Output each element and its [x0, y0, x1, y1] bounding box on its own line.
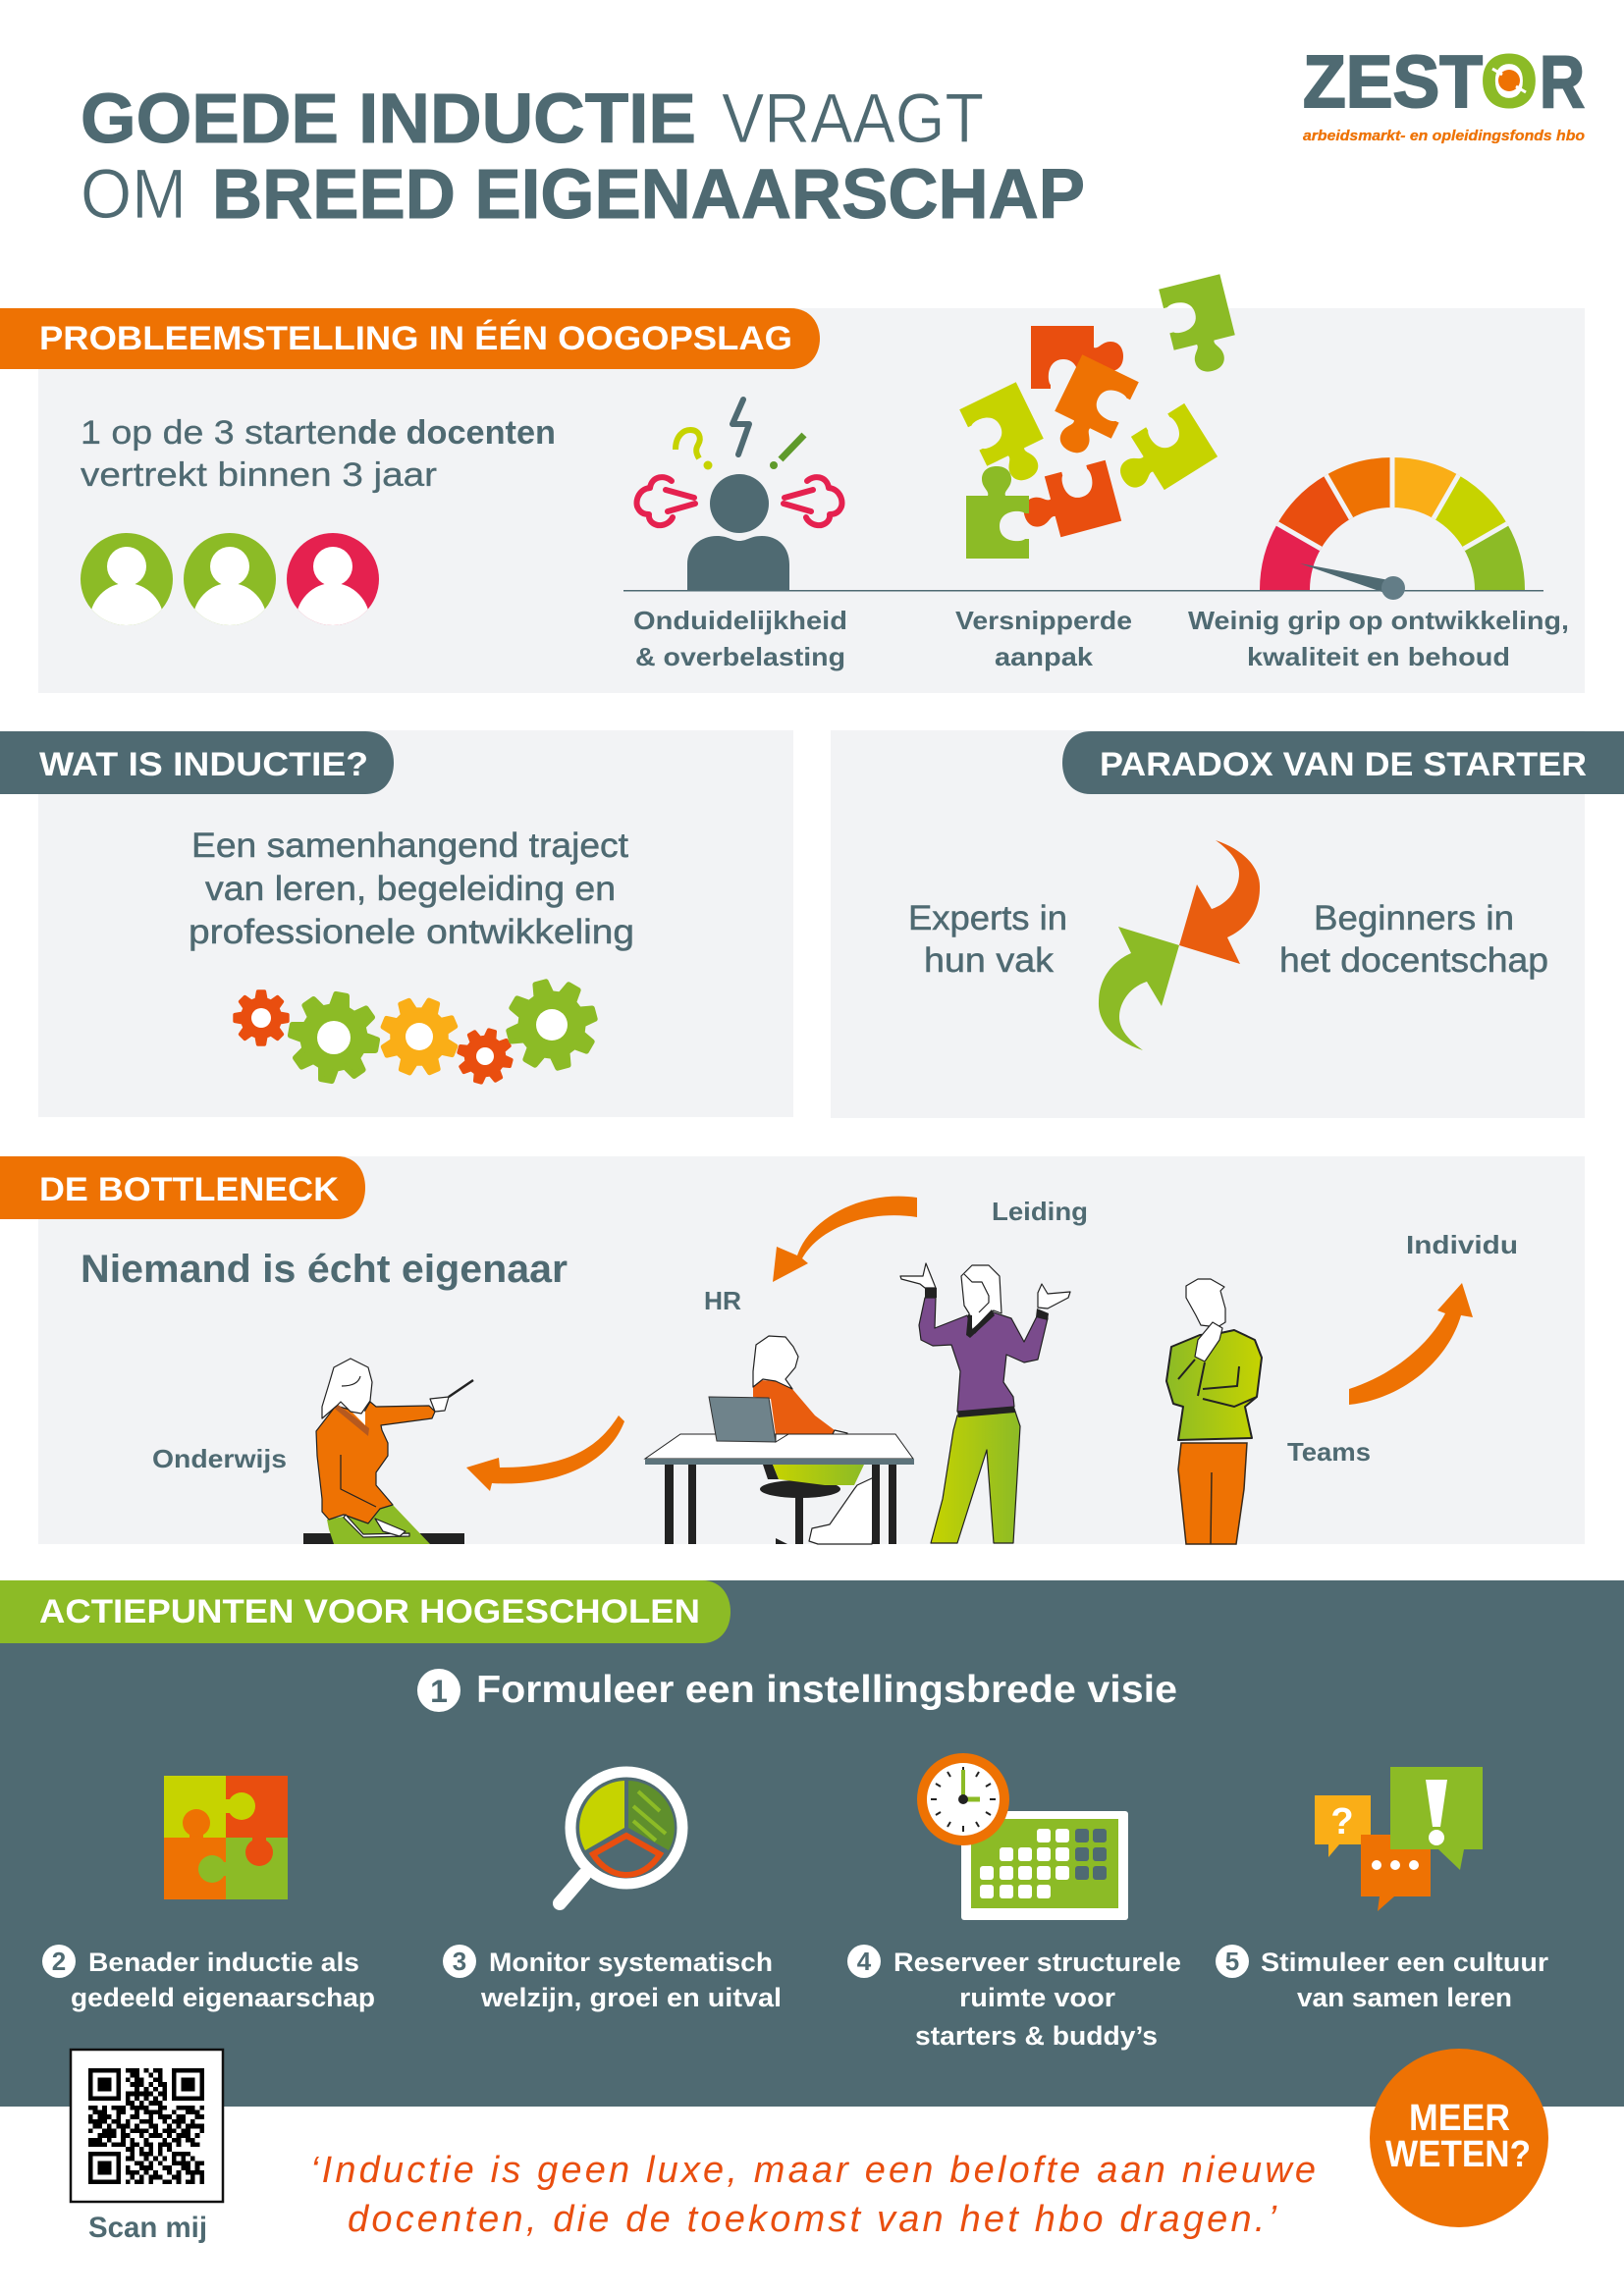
- heading: de bottleneck: DE BOTTLENECK: [39, 1171, 339, 1208]
- logo: Zestor: [1303, 40, 1585, 144]
- heading: paradox: PARADOX VAN DE STARTER: [1100, 746, 1587, 783]
- logo: Zestor: R: [1540, 40, 1585, 123]
- action 3: welzijn, groei en uitval: [480, 1983, 782, 2012]
- figure: thinking man: [1166, 1279, 1262, 1544]
- action 3: 3: [453, 1947, 466, 1976]
- QR code: [71, 2050, 223, 2202]
- label: weinig grip: [1188, 606, 1569, 671]
- text: experts: Experts in: [908, 899, 1067, 937]
- text: experts: hun vak: [924, 941, 1055, 980]
- action 5: 5: [1225, 1947, 1239, 1976]
- title: OM: [81, 156, 187, 234]
- callout: meer weten: [1370, 2049, 1548, 2227]
- text: definition: van leren, begeleiding en: [205, 870, 616, 908]
- icon: gauge: [1260, 457, 1525, 600]
- text: 1 op de 3: vertrekt binnen 3 jaar: [81, 456, 437, 494]
- action 5: [1216, 1945, 1549, 2012]
- action 2: [42, 1945, 375, 2012]
- label: weinig grip: kwaliteit en behoud: [1247, 642, 1510, 671]
- figure: leader with raised hands: [900, 1263, 1070, 1543]
- action 5: Stimuleer een cultuur: [1261, 1948, 1549, 1977]
- icon: overloaded person: [636, 400, 842, 590]
- heading: de bottleneck: [0, 1156, 365, 1219]
- label: leiding: Leiding: [992, 1197, 1088, 1226]
- panel: paradox van de starter: [831, 730, 1624, 1118]
- arrow: HR to onderwijs: [466, 1415, 624, 1491]
- label: versnipperde aanpak: Versnipperde: [955, 606, 1132, 635]
- action 4: Reserveer structurele: [893, 1948, 1181, 1977]
- title: [81, 80, 1085, 234]
- title: VRAAGT: [722, 80, 984, 158]
- action 2: gedeeld eigenaarschap: [71, 1983, 375, 2012]
- action 2: Benader inductie als: [88, 1948, 359, 1977]
- icon: speech bubbles: ?: [1330, 1801, 1354, 1842]
- action 1: heading: 1: [430, 1674, 448, 1709]
- text: 1 op de 3: de docenten: [357, 414, 556, 452]
- action 2: 2: [52, 1947, 66, 1976]
- text: 1 op de 3: [81, 414, 556, 494]
- action 4: [847, 1945, 1181, 2051]
- text: beginners: Beginners in: [1314, 899, 1514, 937]
- label: onduidelijkheid: Onduidelijkheid: [633, 606, 847, 635]
- action 5: van samen leren: [1297, 1983, 1512, 2012]
- heading: actiepunten: [0, 1580, 731, 1643]
- logo: Zestor: arbeidsmarkt- en opleidingsfonds hbo: [1303, 128, 1585, 144]
- icon: scattered puzzle pieces: [959, 274, 1242, 559]
- quote: [310, 2150, 1316, 2240]
- callout: meer weten: MEER: [1409, 2098, 1510, 2139]
- text: beginners: het docentschap: [1279, 941, 1548, 980]
- text: definition: Een samenhangend traject: [191, 827, 628, 865]
- label: teams: Teams: [1287, 1437, 1371, 1467]
- panel: wat is inductie: [0, 730, 793, 1117]
- text: experts: [908, 899, 1067, 980]
- label: onderwijs: Onderwijs: [152, 1444, 287, 1473]
- label: scan mij: Scan mij: [88, 2212, 207, 2244]
- icon: calendar with clock: [917, 1753, 1128, 1920]
- panel: actiepunten: [0, 1580, 1624, 2107]
- text: beginners: [1279, 899, 1548, 980]
- quote: docenten, die de toekomst van het hbo dragen.’: [348, 2199, 1277, 2240]
- heading: probleemstelling: [0, 308, 820, 369]
- label: individu: Individu: [1406, 1230, 1518, 1259]
- action 1: heading: Formuleer een instellingsbrede visie: [476, 1669, 1177, 1711]
- arrow: teams to individu: [1349, 1283, 1473, 1405]
- icon: magnifier with pie chart: [560, 1772, 682, 1903]
- heading: actiepunten: ACTIEPUNTEN VOOR HOGESCHOLEN: [39, 1593, 700, 1630]
- action 4: starters & buddy’s: [915, 2021, 1158, 2051]
- text: niemand is echt eigenaar: Niemand is écht eigenaar: [81, 1248, 568, 1291]
- heading: wat is inductie: [0, 731, 394, 794]
- title: BREED EIGENAARSCHAP: [212, 156, 1085, 234]
- label: versnipperde aanpak: aanpak: [995, 642, 1094, 671]
- baseline rule: [623, 590, 1543, 591]
- panel: probleemstelling: [0, 274, 1585, 693]
- label: HR: HR: [704, 1286, 741, 1315]
- action 3: [443, 1945, 782, 2012]
- panel: de bottleneck: [0, 1156, 1585, 1544]
- title: GOEDE INDUCTIE: [81, 80, 696, 158]
- callout: meer weten: WETEN?: [1385, 2134, 1531, 2175]
- label: onduidelijkheid: & overbelasting: [635, 642, 845, 671]
- action 3: Monitor systematisch: [489, 1948, 773, 1977]
- icon: puzzle square: [164, 1776, 288, 1899]
- label: versnipperde aanpak: [955, 606, 1132, 671]
- quote: ‘Inductie is geen luxe, maar een belofte aan nieuwe: [310, 2150, 1316, 2191]
- heading: paradox: [1062, 731, 1624, 794]
- figure: teacher: [303, 1359, 473, 1544]
- icon: three people: [81, 533, 379, 625]
- text: definition: [189, 827, 634, 951]
- text: 1 op de 3: 1 op de 3 starten: [81, 414, 357, 452]
- figure: HR at desk: [645, 1336, 914, 1544]
- icon: gears: [235, 966, 611, 1089]
- logo: Zestor: ZEST: [1303, 40, 1483, 123]
- label: weinig grip: Weinig grip op ontwikkeling,: [1188, 606, 1569, 635]
- heading: probleemstelling: PROBLEEMSTELLING IN ÉÉN OOGOPSLAG: [39, 320, 792, 357]
- icon: speech bubbles: [1315, 1767, 1483, 1911]
- icon: opposing arrows: [1099, 840, 1260, 1050]
- action 4: ruimte voor: [959, 1983, 1116, 2012]
- arrow: leiding to HR: [773, 1197, 917, 1282]
- text: definition: professionele ontwikkeling: [189, 913, 634, 951]
- action 4: 4: [857, 1947, 872, 1976]
- logo: Zestor: O: [1481, 40, 1538, 124]
- heading: wat is inductie: WAT IS INDUCTIE?: [39, 746, 368, 783]
- label: onduidelijkheid: [633, 606, 847, 671]
